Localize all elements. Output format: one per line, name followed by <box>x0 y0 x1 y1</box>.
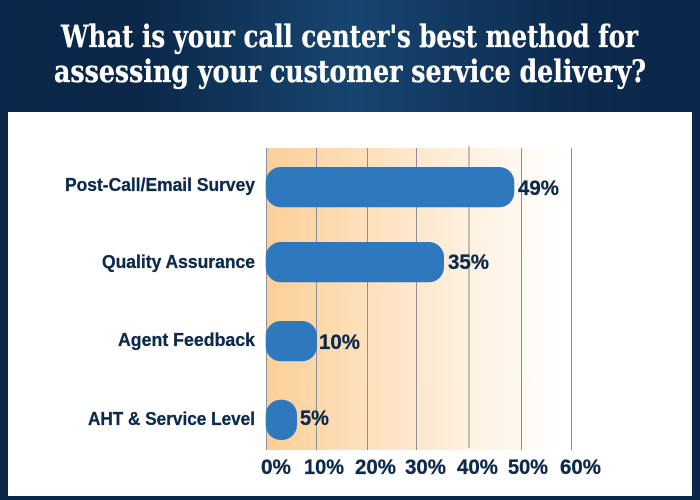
bar: Post-Call/Email Survey: 49% <box>518 177 559 200</box>
bar: Post-Call/Email Survey <box>65 167 559 207</box>
axis labels: 30% <box>405 456 446 479</box>
bar chart <box>65 146 601 479</box>
bar: AHT & Service Level: AHT & Service Level <box>88 409 255 429</box>
bar: Quality Assurance <box>102 242 489 282</box>
axis labels: 40% <box>457 456 498 479</box>
axis labels: 50% <box>508 456 548 479</box>
axis labels: 60% <box>560 456 601 479</box>
bar: AHT & Service Level: 5% <box>300 407 329 430</box>
title <box>54 19 646 90</box>
bar: Agent Feedback: 10% <box>319 331 360 354</box>
chart gradient background <box>266 148 562 450</box>
axis labels: 0% <box>261 456 291 479</box>
bar: Post-Call/Email Survey: Post-Call/Email Survey <box>65 175 255 195</box>
axis labels <box>261 456 601 479</box>
axis labels: 10% <box>304 456 344 479</box>
panel: chart area <box>8 112 692 496</box>
bar: AHT & Service Level <box>88 400 329 440</box>
axis labels: 20% <box>355 456 396 479</box>
bar: Agent Feedback: Agent Feedback <box>118 330 256 350</box>
bar: Quality Assurance: Quality Assurance <box>102 252 255 272</box>
bar: Quality Assurance: 35% <box>448 251 489 274</box>
bar: Agent Feedback <box>118 321 360 361</box>
